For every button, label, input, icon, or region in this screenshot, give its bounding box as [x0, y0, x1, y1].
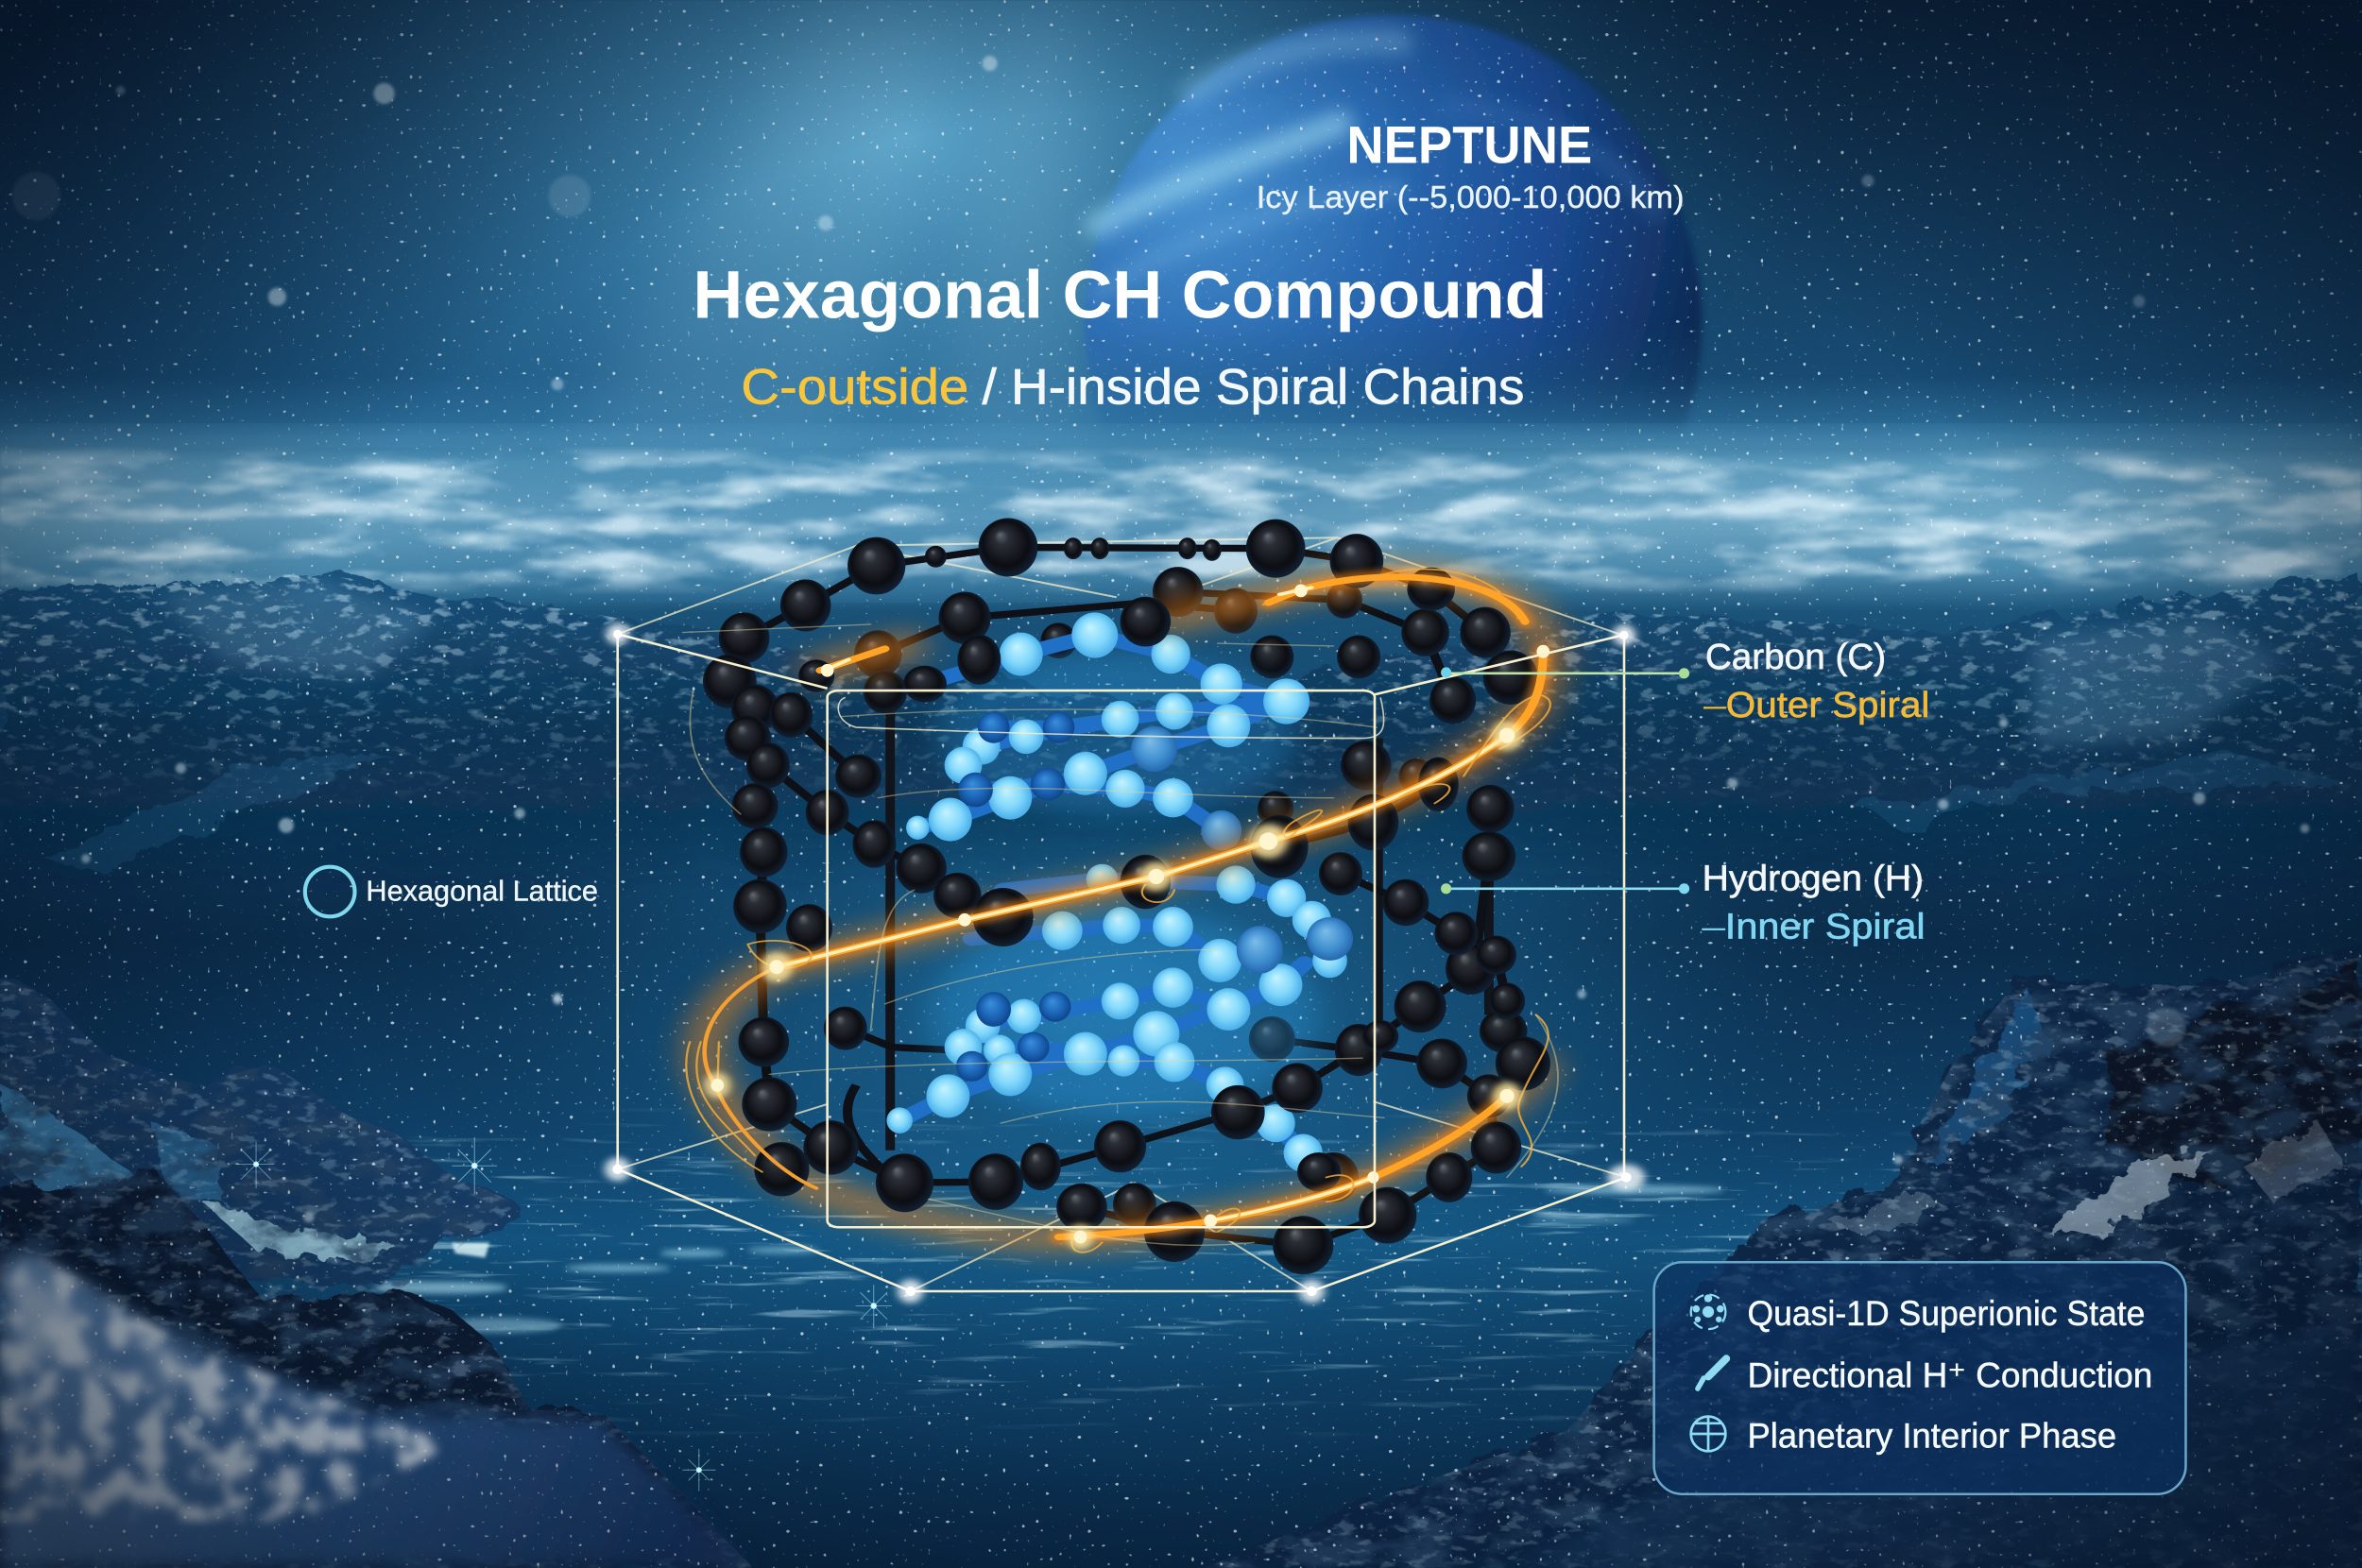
label: hydrogen inner spiral: —	[1703, 915, 1726, 939]
foreground rocks	[0, 954, 2362, 1568]
lattice vertices	[605, 623, 1645, 1304]
label: hydrogen inner spiral: Hydrogen (H)	[1703, 858, 1924, 898]
glowing nodes	[705, 721, 1523, 1250]
light rays	[573, 0, 1085, 452]
center glow behind the model	[0, 603, 2362, 1568]
panel: key properties	[1654, 1262, 2185, 1494]
subtitle: / H-inside Spiral Chains	[983, 359, 1525, 415]
subtitle: C-outside	[741, 359, 968, 415]
back lattice edges	[618, 537, 1626, 1291]
ocean streaks	[0, 1099, 2362, 1446]
subtitle	[741, 359, 1525, 415]
icon: superionic state	[1691, 1294, 1725, 1329]
icon: planetary globe	[1691, 1417, 1725, 1451]
carbon atoms, back layer	[824, 567, 1467, 1226]
planet: Neptune	[1079, 12, 1704, 429]
title: Hexagonal CH Compound	[693, 258, 1547, 333]
label: carbon outer spiral: —	[1703, 694, 1727, 718]
label: Neptune: NEPTUNE	[1346, 114, 1592, 174]
label: hydrogen inner spiral: Inner Spiral	[1725, 906, 1926, 946]
text: planetary interior phase: Planetary Interior Phase	[1747, 1416, 2116, 1455]
hydrogen chain rods	[899, 635, 1330, 1153]
label: hexagonal lattice: Hexagonal Lattice	[366, 877, 598, 908]
label: hydrogen inner spiral	[1703, 858, 1926, 946]
label: hexagonal lattice	[305, 867, 598, 916]
distant icy mountains	[0, 557, 2362, 889]
carbon outer spiral atoms	[703, 518, 1550, 1274]
label: carbon outer spiral: Carbon (C)	[1705, 637, 1886, 677]
text: quasi-1D superionic state: Quasi-1D Superionic State	[1747, 1294, 2145, 1333]
front lattice edges	[618, 634, 1626, 1291]
back support rods	[890, 706, 1489, 1150]
horizon foam band	[0, 448, 2362, 593]
orange halo behind carbon atoms	[705, 576, 1546, 1237]
label: carbon outer spiral	[1703, 637, 1929, 725]
icon: directional conduction	[1698, 1358, 1726, 1389]
star glints	[238, 1137, 892, 1491]
right rock snow patches	[1830, 1122, 2342, 1238]
orange wisps	[686, 570, 1550, 1253]
hydrogen atoms	[886, 612, 1347, 1172]
carbon chain rods	[729, 547, 1523, 1245]
distant streak above horizon	[0, 428, 2362, 443]
glowing electron path	[683, 570, 1558, 1253]
hydrogen inner spiral	[886, 612, 1353, 1172]
hydrogen leader line	[1441, 883, 1689, 894]
carbon leader line	[1441, 667, 1689, 678]
text: directional H+ conduction: Directional H⁺ Conduction	[1747, 1356, 2152, 1395]
label: icy layer depth: Icy Layer (--5,000-10,000 km)	[1257, 180, 1685, 215]
blurred foreground snow	[0, 1254, 2362, 1568]
hydrogen glow	[929, 652, 1319, 1117]
hexagonal lattice and spiral chains model	[605, 518, 1645, 1304]
label: carbon outer spiral: Outer Spiral	[1726, 685, 1929, 725]
